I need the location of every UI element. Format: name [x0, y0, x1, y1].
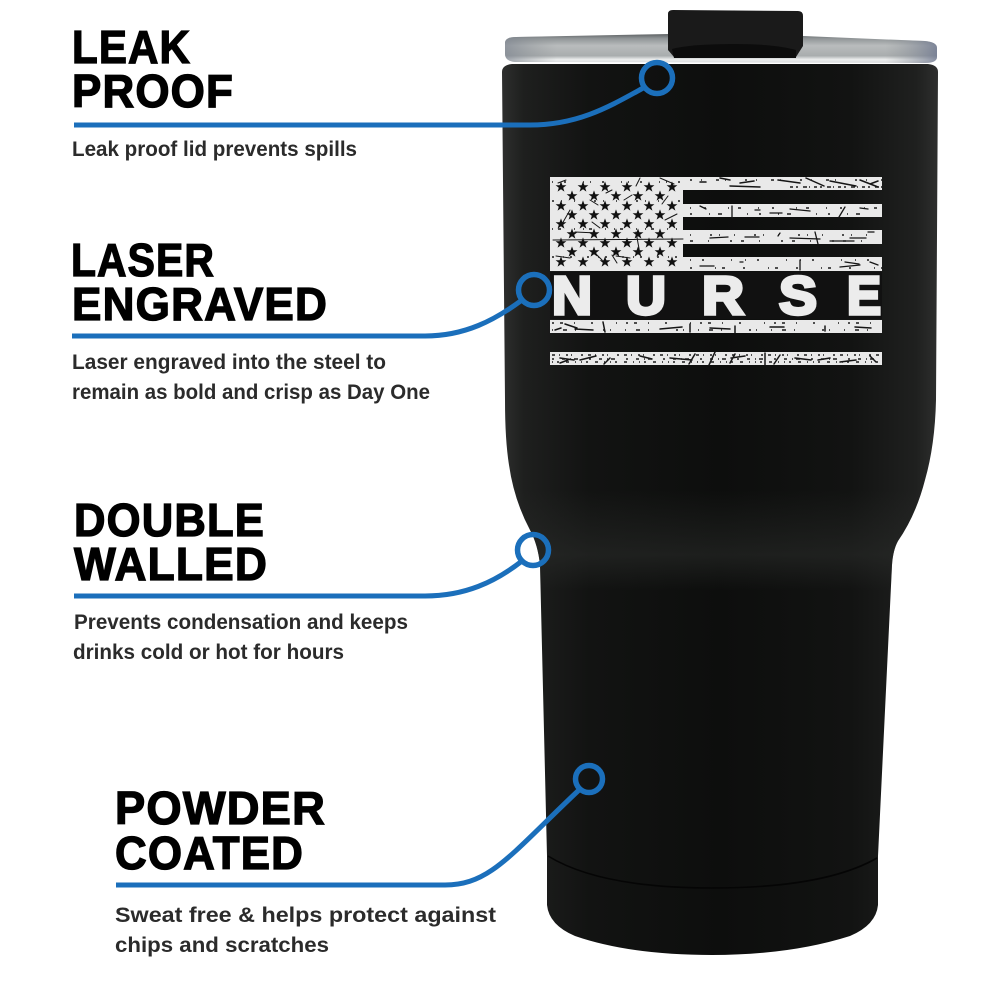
heading: laser engraved [71, 234, 328, 330]
heading: powder coated [115, 782, 326, 879]
description: powder coated [115, 904, 496, 957]
heading: powder coated: COATED [115, 827, 304, 879]
heading: double walled [74, 494, 268, 590]
heading: double walled: WALLED [74, 538, 268, 590]
NURSE text: N [552, 266, 592, 326]
callout: powder coated [115, 766, 602, 957]
description: laser engraved [72, 351, 430, 404]
flag canton [550, 177, 683, 271]
tumbler product photo [500, 10, 940, 955]
clear lid [505, 34, 937, 63]
callout: leak proof [72, 21, 672, 161]
stars [556, 181, 677, 267]
heading: leak proof: LEAK [72, 21, 191, 73]
description: double walled [73, 611, 408, 664]
heading: leak proof [72, 21, 234, 117]
connector line: double walled [74, 534, 548, 596]
heading: leak proof: PROOF [72, 65, 234, 117]
description: double walled: Prevents condensation and keeps [74, 611, 408, 634]
NURSE text: R [702, 266, 744, 326]
description: laser engraved: Laser engraved into the steel to [72, 351, 386, 374]
flag stripes [550, 177, 882, 365]
description: powder coated: chips and scratches [115, 934, 329, 957]
callout: laser engraved [71, 234, 550, 404]
lid tab [668, 10, 803, 58]
NURSE text: S [779, 266, 817, 326]
connector line: leak proof [74, 62, 672, 125]
connector line: powder coated [116, 766, 602, 885]
heading: laser engraved: LASER [71, 234, 215, 286]
description: leak proof: Leak proof lid prevents spills [72, 138, 357, 161]
heading: double walled: DOUBLE [74, 494, 265, 546]
callout: double walled [73, 494, 548, 664]
distress marks [553, 178, 878, 365]
tumbler body [502, 64, 938, 955]
base seam [548, 856, 877, 888]
lower body highlight band [522, 512, 914, 578]
description: powder coated: Sweat free & helps protect against [115, 904, 496, 927]
NURSE text: E [847, 266, 881, 326]
engraved flag graphic [550, 177, 882, 365]
distress specks [552, 180, 882, 362]
NURSE text [550, 266, 882, 326]
heading: laser engraved: ENGRAVED [72, 278, 328, 330]
heading: powder coated: POWDER [115, 782, 326, 834]
connector line: laser engraved [72, 274, 550, 336]
NURSE text: U [626, 266, 666, 326]
description: double walled: drinks cold or hot for hours [73, 641, 344, 664]
description: laser engraved: remain as bold and crisp as Day One [72, 381, 430, 404]
